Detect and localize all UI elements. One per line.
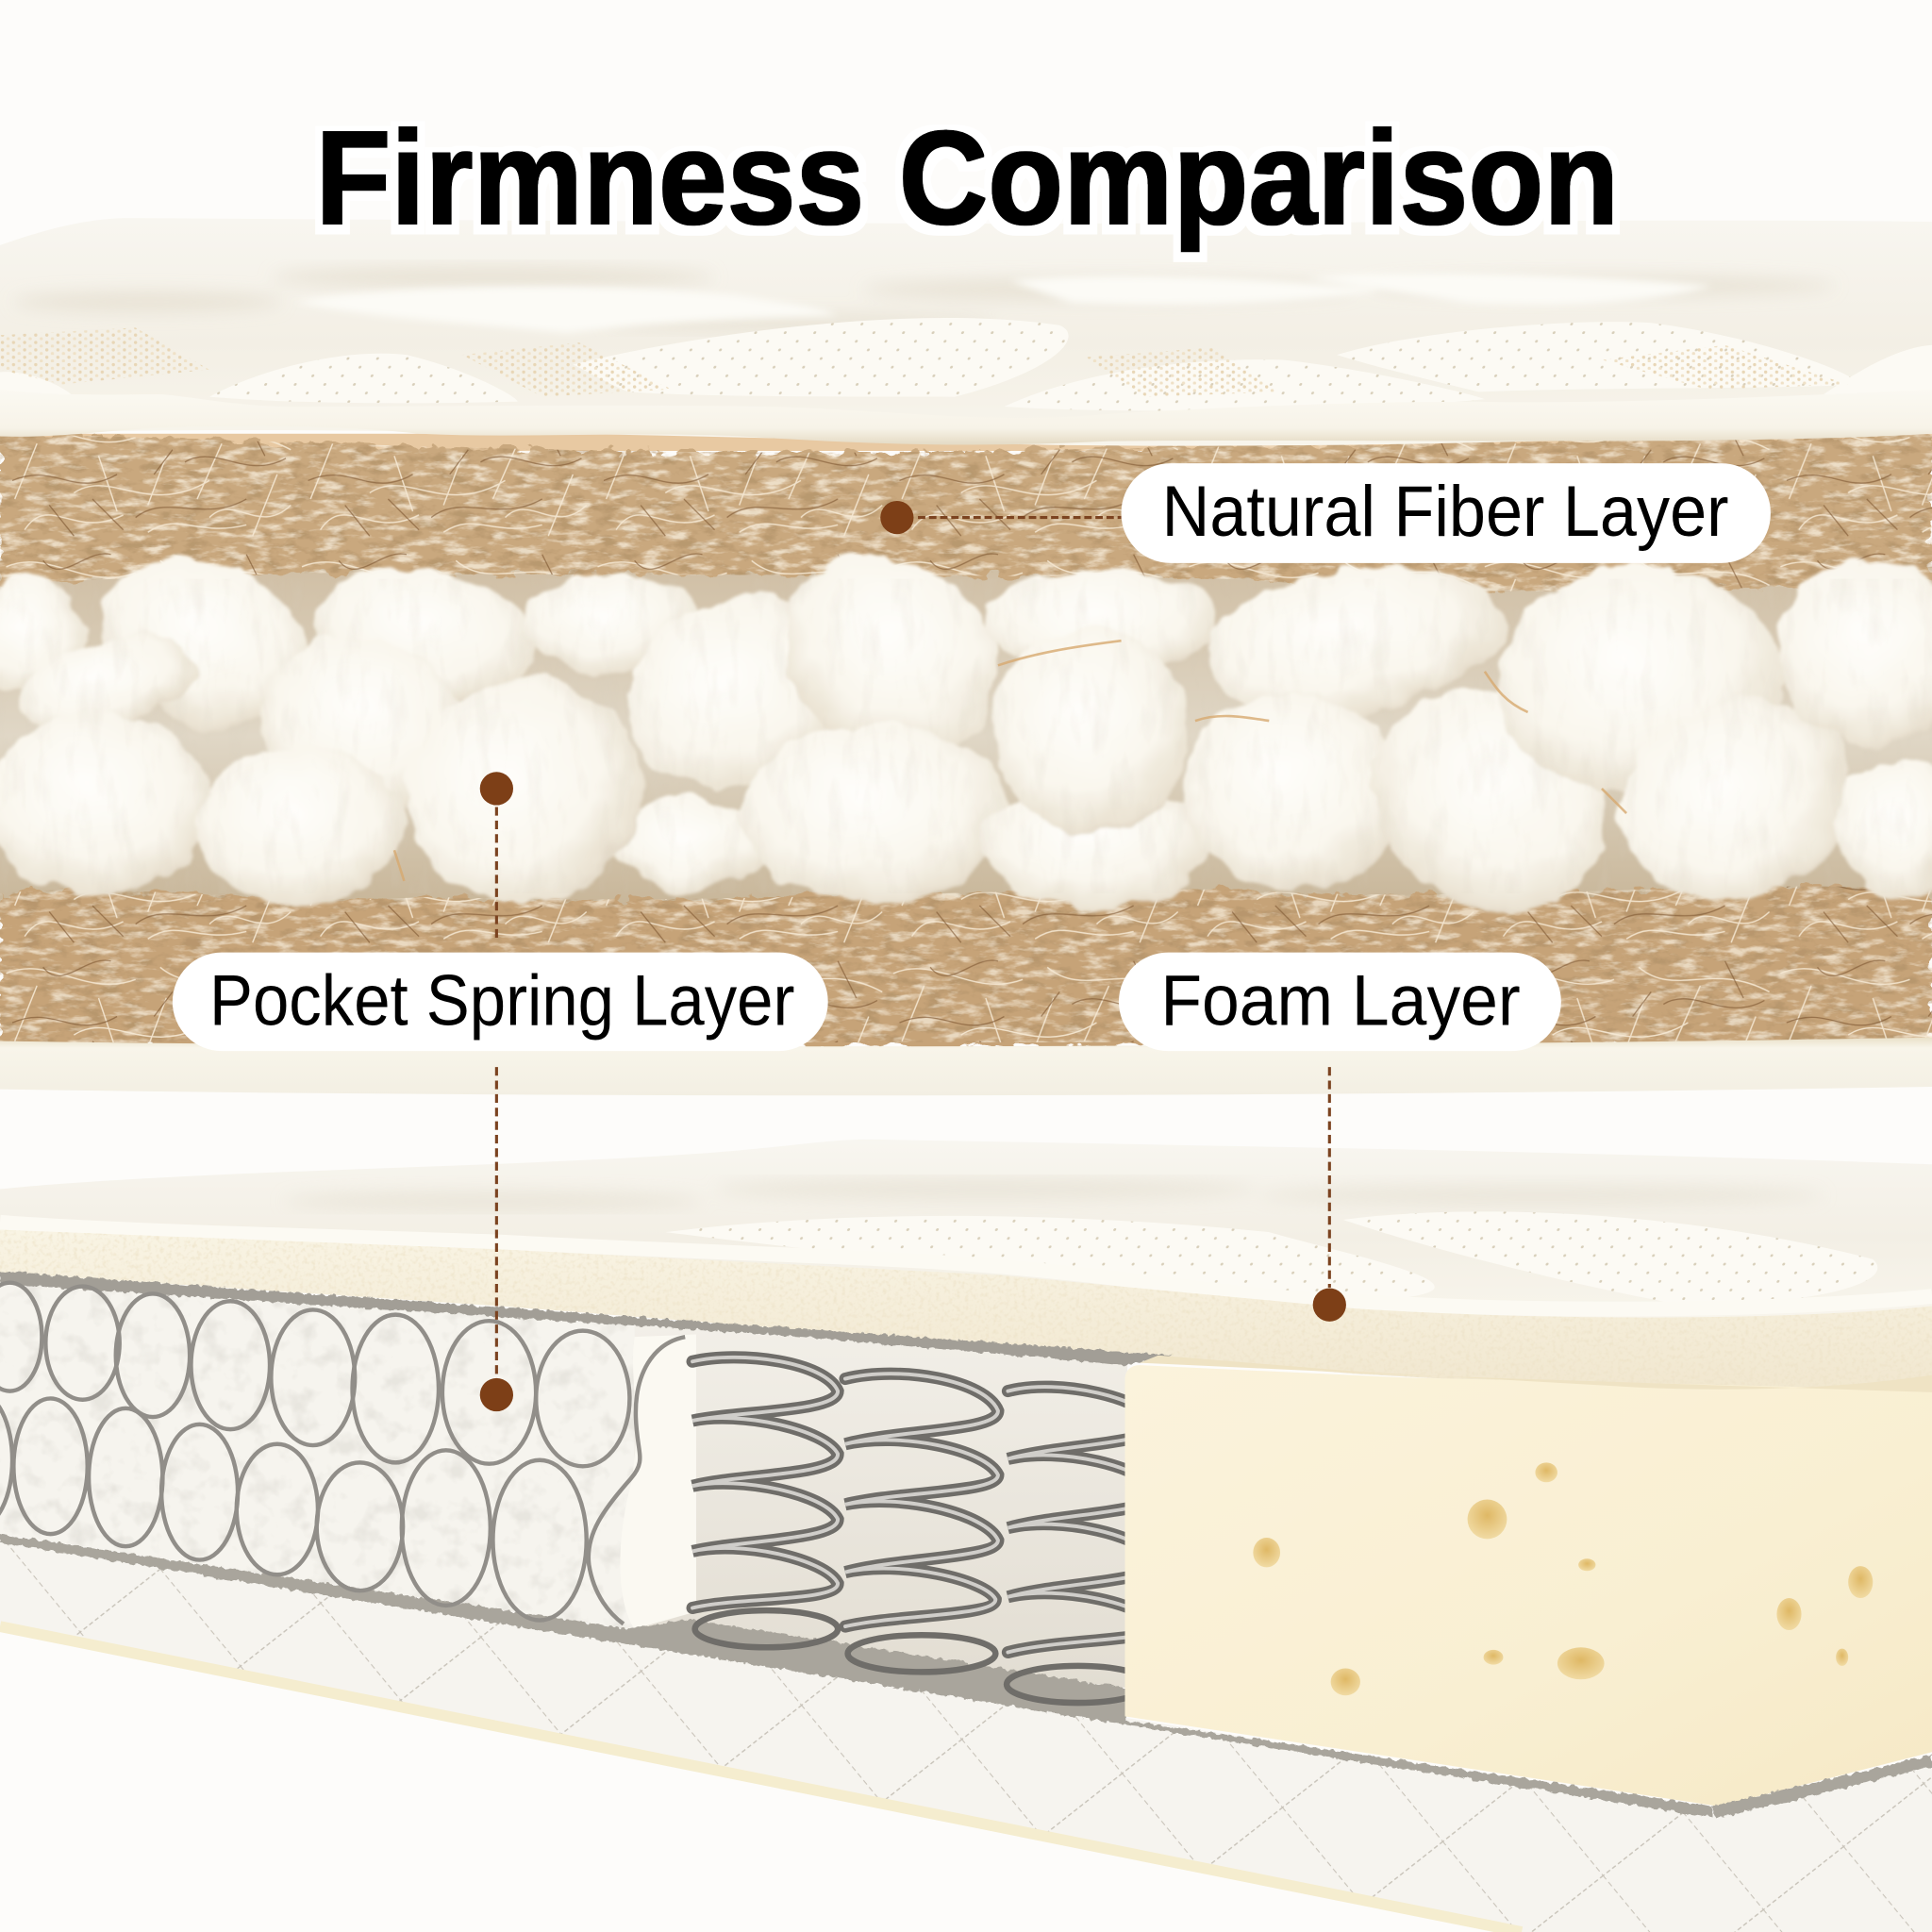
foam block bbox=[1124, 1365, 1932, 1807]
distant quilting bbox=[12, 266, 1836, 330]
label text: Natural Fiber Layer bbox=[1162, 472, 1728, 552]
marker dot spring bbox=[480, 1378, 513, 1411]
label text: Pocket Spring Layer bbox=[209, 961, 794, 1041]
pocket spring interior bbox=[0, 1281, 690, 1639]
quilted top mattress surface bbox=[0, 218, 1932, 446]
leader line lower bbox=[495, 1067, 498, 1377]
rolled cover lip bbox=[0, 1223, 1932, 1309]
gray felt floor bbox=[0, 1534, 1713, 1818]
topper underside over foam block bbox=[1140, 1356, 1932, 1392]
leader line upper bbox=[495, 808, 498, 942]
cotton layer backing bbox=[0, 567, 1932, 906]
leader line bbox=[1328, 1067, 1331, 1288]
upper fiber layer bbox=[0, 425, 1932, 597]
spring cavity bbox=[635, 1324, 1127, 1688]
cotton puffs bbox=[0, 519, 1932, 953]
label pill bbox=[1122, 463, 1771, 563]
upper mattress: natural fiber and cotton cross-section bbox=[0, 218, 1932, 1095]
callout: foam layer bbox=[1119, 953, 1561, 1322]
gray felt ceiling strip bbox=[0, 1272, 1173, 1365]
label pill bbox=[1119, 953, 1561, 1051]
gray strip under foam block bbox=[1713, 1755, 1932, 1819]
front-row cushions bbox=[0, 318, 1932, 410]
bottom cover band bbox=[0, 1038, 1932, 1095]
tan twine between cotton puffs bbox=[394, 641, 1626, 881]
piping edge bbox=[0, 1626, 1522, 1932]
quilted front edge band bbox=[0, 390, 1932, 444]
open coil springs bbox=[692, 1357, 1158, 1703]
marker dot cotton bbox=[480, 772, 513, 806]
pocket spring wool texture bbox=[0, 1285, 634, 1628]
quilted top surface bbox=[0, 1140, 1932, 1318]
perforated cushions bbox=[665, 1216, 1435, 1301]
title: Firmness Comparison bbox=[315, 103, 1619, 252]
pocket spring wire loops bbox=[0, 1283, 685, 1624]
foam topper layer bbox=[0, 1230, 1932, 1387]
coil column 1 bbox=[692, 1357, 838, 1647]
foam air holes bbox=[1253, 1462, 1873, 1695]
lower fiber layer bbox=[0, 882, 1932, 1047]
quilted base side panel bbox=[0, 1534, 1932, 1932]
leader line bbox=[918, 516, 1122, 519]
white foam side wall bbox=[620, 1335, 696, 1629]
mid-row cushions bbox=[295, 273, 1713, 333]
cotton fibre shading bbox=[0, 579, 1932, 893]
label pill bbox=[173, 953, 828, 1051]
callout: natural fiber layer bbox=[880, 463, 1771, 563]
woven seam patches bbox=[0, 327, 1848, 397]
coil column 2 bbox=[845, 1374, 998, 1672]
label text: Foam Layer bbox=[1160, 961, 1521, 1041]
callout: pocket spring layer bbox=[173, 772, 828, 1411]
marker dot bbox=[1313, 1289, 1346, 1322]
coil column 3 bbox=[1007, 1387, 1158, 1703]
lower mattress: pocket springs and foam cross-section bbox=[0, 1140, 1932, 1932]
perforation dots on cushions bbox=[209, 318, 1860, 410]
marker dot bbox=[880, 501, 913, 534]
